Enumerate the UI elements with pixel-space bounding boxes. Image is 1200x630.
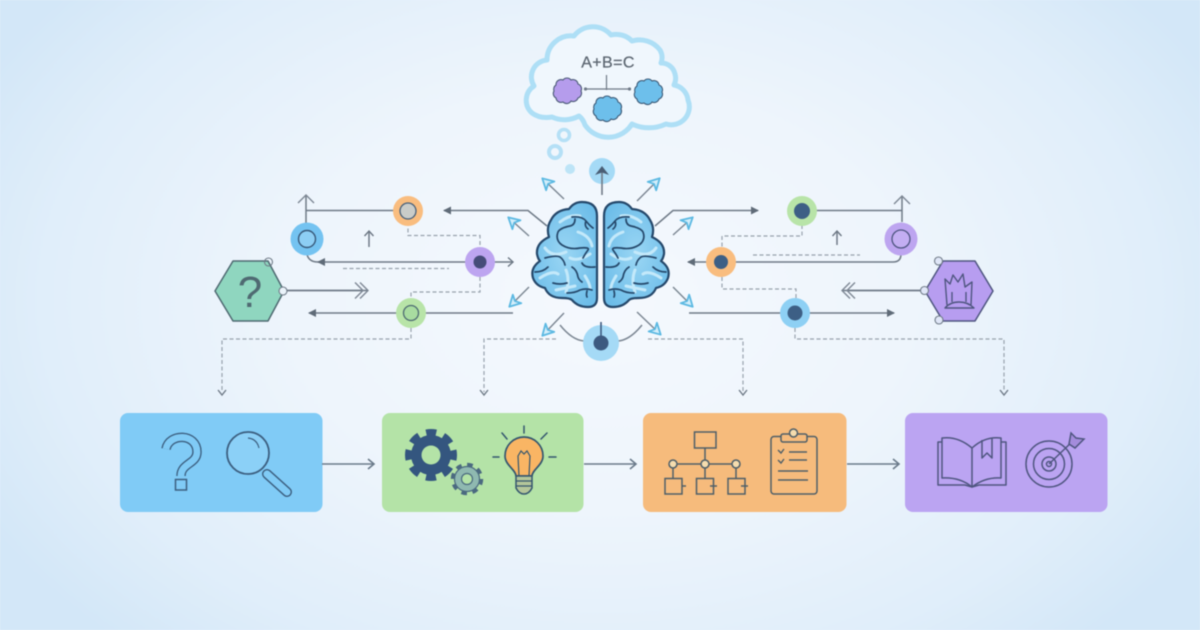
icon: light bulb [493,426,556,494]
left flow network [215,195,556,395]
hexagon: question: ? [238,268,262,317]
panel: step 1 question and search [120,413,322,512]
icon: question mark [166,437,197,490]
arrow: step 3 to 4 [847,459,899,469]
right dashed connectors [648,225,1004,392]
hexagon: crown [920,257,993,324]
node: purple ring [884,222,918,256]
icon: open book [938,438,1006,487]
node: green dark [787,196,817,226]
formula text: A+B=C [581,54,635,72]
mini brain blue right [634,79,663,105]
icon: large gear [409,433,453,477]
panel: step 2 gears and idea [382,413,584,512]
left dashed arrow heads [218,390,488,395]
right flow network [648,196,1008,395]
central up arrow node [589,158,615,195]
node: blue dark [780,298,810,328]
radial arrows around brain [509,179,692,335]
left hemisphere [532,202,597,307]
left dashed connectors [222,222,556,392]
mini brain blue centre [593,96,622,122]
cloud connector lines [584,75,631,91]
icon: magnifier [227,432,287,492]
icon: clipboard [771,429,817,494]
bottom central node [560,322,642,361]
right dashed arrow heads [739,390,1008,395]
node: purple [465,247,495,277]
panel: step 3 plan and checklist [643,413,846,512]
panel: step 4 knowledge and goal [905,413,1108,512]
arrow: step 2 to 3 [584,459,636,469]
mini brain purple [553,78,582,104]
node: blue ring [290,222,324,256]
hexagon: question [215,258,287,321]
left connector lines [287,195,547,313]
thought cloud [526,27,689,137]
icon: org chart [665,432,748,494]
arrow: step 1 to 2 [322,459,374,469]
node: orange [393,196,423,226]
icon: small gear [453,465,481,493]
right connector lines [655,196,924,313]
icon: target with arrow [1026,433,1084,487]
right hemisphere [604,202,669,307]
brain [532,202,669,307]
node: orange dark [706,247,736,277]
node: green [396,298,426,328]
thought bubbles [549,130,575,174]
